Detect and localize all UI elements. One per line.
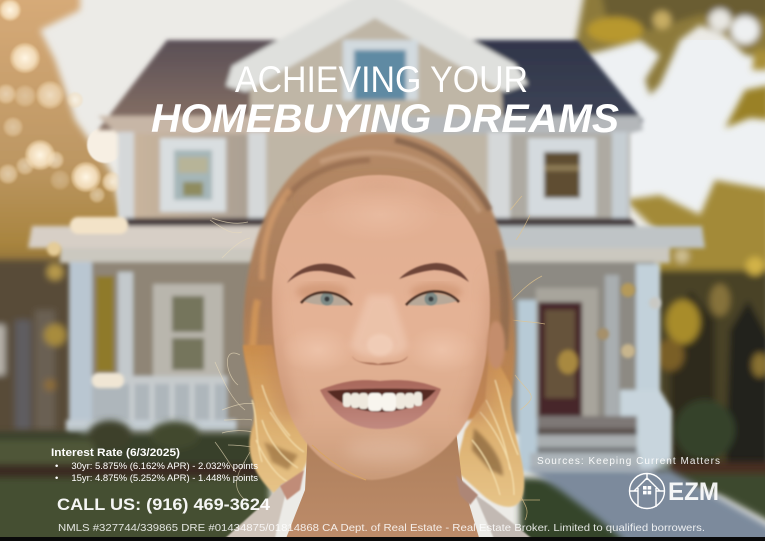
house: entry plinth — [620, 390, 672, 470]
cheeks — [282, 187, 478, 374]
sources: Sources: Keeping Current Matters — [537, 456, 720, 467]
jawline highlight — [312, 445, 366, 480]
right tree top foliage — [575, 0, 765, 128]
right tree lower foliage — [625, 180, 765, 490]
right blouse collar — [462, 485, 535, 541]
left collar shadow — [280, 470, 304, 500]
house: steps — [530, 416, 640, 471]
house: porch roof shadow — [125, 218, 640, 229]
house: left roof — [98, 40, 375, 130]
neck — [285, 430, 480, 541]
30yr rate: • 30yr: 5.875% (6.162% APR) - 2.032% points — [55, 461, 258, 472]
title line 1: ACHIEVING YOUR — [235, 59, 528, 100]
house: lower left window — [153, 284, 223, 378]
house: gable trim — [226, 0, 528, 92]
flyaway hair left — [210, 218, 255, 500]
house: gable face — [250, 0, 510, 225]
hair cap — [243, 133, 515, 420]
front path — [528, 470, 765, 541]
house: gold gap window — [96, 276, 114, 372]
face side shading — [262, 185, 500, 420]
icon: house in circle — [630, 473, 664, 508]
right hair lock — [455, 345, 524, 507]
chin highlight — [345, 437, 425, 463]
right eyebrow — [399, 263, 469, 282]
porch cream bokeh highlights — [47, 217, 661, 388]
left lower trees and shaded area — [0, 260, 80, 445]
house: upper right window — [528, 138, 596, 216]
woman portrait — [210, 133, 545, 541]
left blouse collar — [222, 478, 300, 541]
left eye — [301, 292, 352, 306]
house: left eave band — [98, 116, 375, 134]
house — [28, 0, 705, 472]
pale sky right side — [590, 40, 765, 210]
title line 2: HOMEBUYING DREAMS — [151, 97, 619, 141]
right eye — [406, 291, 459, 306]
call to action phone: CALL US: (916) 469-3624 — [57, 495, 271, 514]
15yr rate: • 15yr: 4.875% (5.252% APR) - 1.448% points — [55, 473, 258, 484]
EZM logo — [630, 473, 719, 508]
title — [151, 59, 619, 141]
left hair lock — [243, 345, 312, 495]
house: porch columns — [69, 262, 660, 472]
house: right roof — [375, 40, 643, 130]
left tree with warm light — [0, 0, 125, 310]
house: upper wall — [118, 120, 630, 230]
house: upper left window — [160, 138, 226, 212]
house: gable window — [343, 40, 418, 100]
house: porch band — [28, 226, 705, 263]
house: pilasters — [118, 132, 628, 222]
house: porch railing — [66, 376, 236, 432]
eye shadow — [296, 283, 462, 301]
ear — [487, 321, 505, 369]
left eyebrow — [287, 264, 356, 283]
interest rate block — [51, 447, 258, 484]
lips — [320, 380, 441, 429]
face — [272, 175, 490, 480]
house: front door — [536, 288, 598, 418]
legal disclaimer: NMLS #327744/339865 DRE #01434875/01814868 CA Dept. of Real Estate - Real Estate Broker. Limited to qualified borrowers. — [58, 522, 705, 534]
right collar shadow — [456, 475, 478, 505]
bottom black edge — [0, 537, 765, 541]
logo wordmark: EZM — [668, 478, 719, 506]
interest rate heading: Interest Rate (6/3/2025) — [51, 447, 180, 459]
mouth — [320, 380, 441, 429]
nose — [350, 295, 408, 365]
flyaway hair right — [510, 196, 545, 520]
hair streaks — [252, 140, 505, 350]
teeth — [343, 392, 422, 411]
mouth interior — [327, 389, 436, 412]
house: lower wall — [80, 262, 655, 434]
lawn and shrubs — [0, 420, 765, 541]
house: right eave band — [375, 116, 643, 134]
left trees bokeh — [0, 0, 123, 203]
